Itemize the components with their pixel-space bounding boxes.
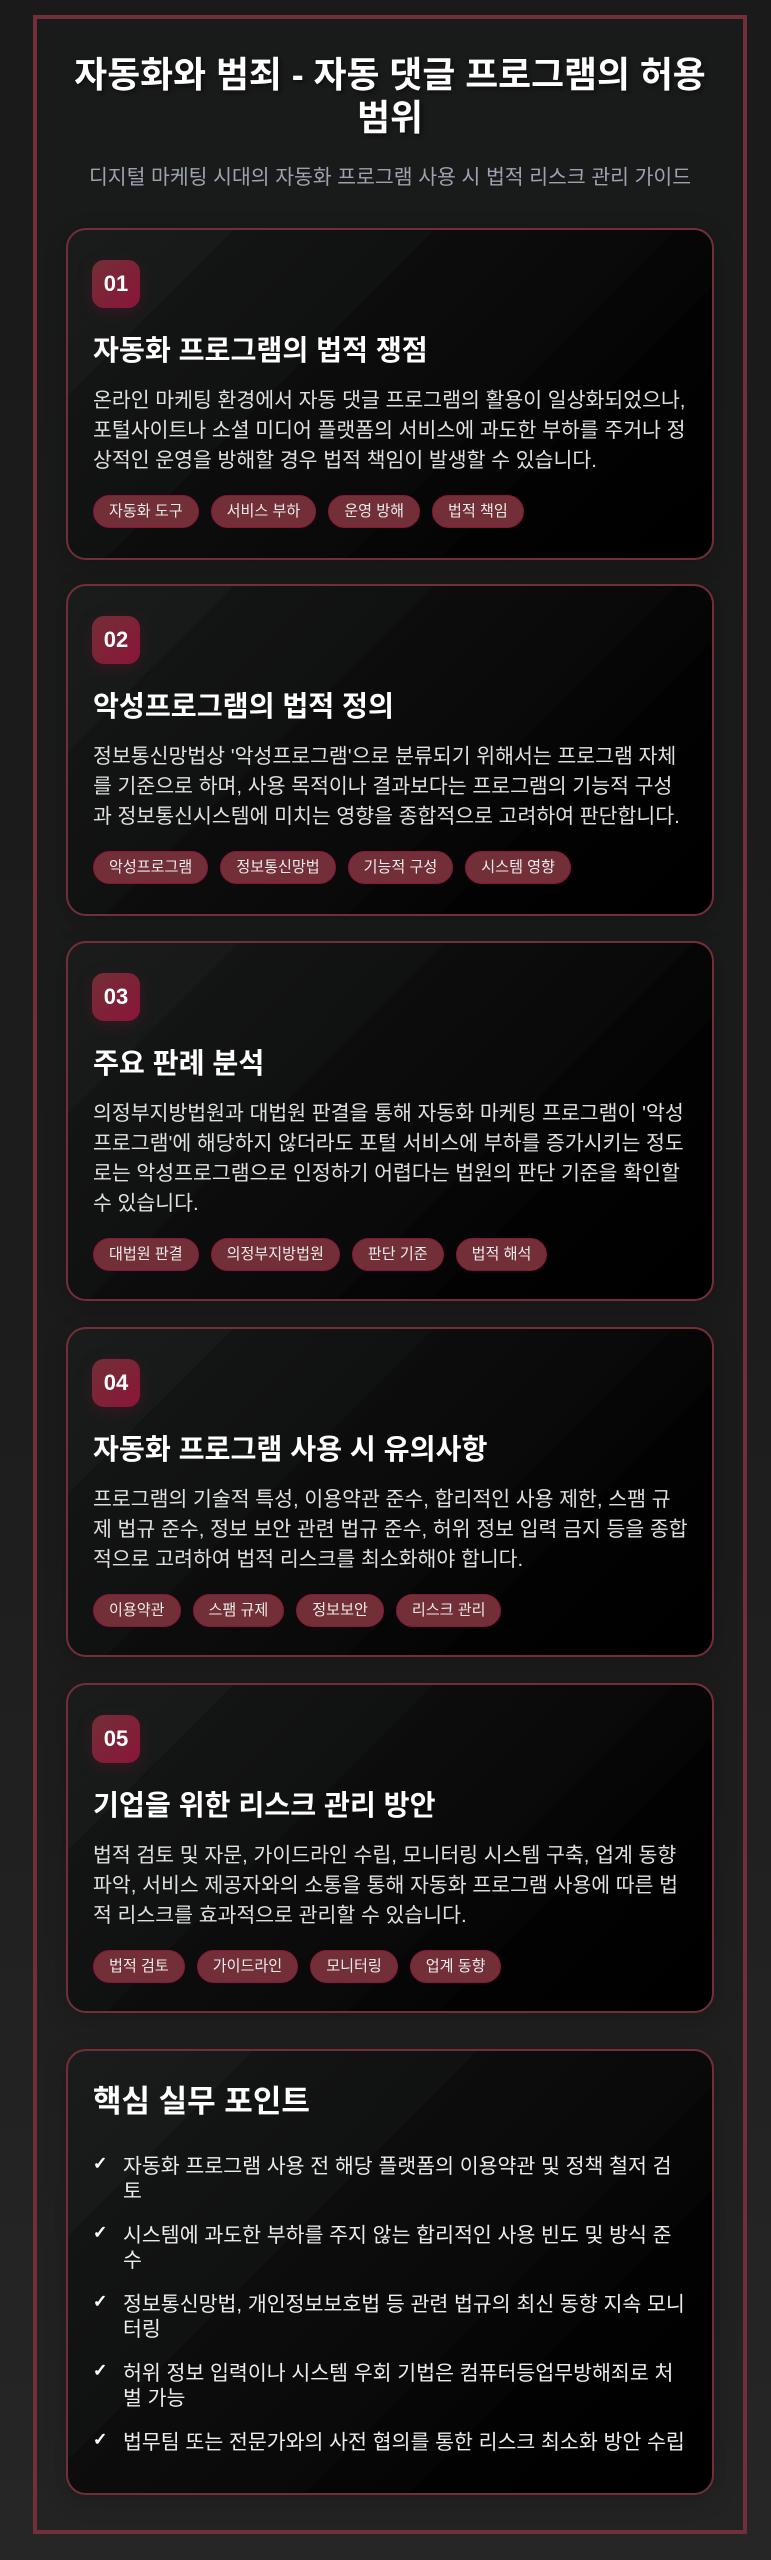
tags 02: 시스템 영향 bbox=[481, 859, 555, 876]
badge 01: 01 bbox=[104, 271, 128, 296]
tags 05: 업계 동향 bbox=[426, 1958, 485, 1975]
body text 04 bbox=[93, 1488, 688, 1571]
panel: 03 case analysis bbox=[66, 941, 714, 1301]
body text 03: 프로그램'에 해당하지 않더라도 포털 서비스에 부하를 증가시키는 정도 bbox=[93, 1132, 684, 1155]
checklist item 5: ✓ bbox=[93, 2430, 107, 2450]
heading 05: 기업을 위한 리스크 관리 방안 bbox=[93, 1789, 436, 1821]
panel: 02 malware definition bbox=[66, 584, 714, 916]
body text 02: 정보통신망법상 '악성프로그램'으로 분류되기 위해서는 프로그램 자체 bbox=[93, 745, 676, 768]
tags 01: 운영 방해 bbox=[344, 503, 404, 520]
body text 02: 를 기준으로 하며, 사용 목적이나 결과보다는 프로그램의 기능적 구성 bbox=[93, 775, 672, 798]
tags 04 bbox=[93, 1594, 501, 1627]
tags 01: 서비스 부하 bbox=[227, 503, 300, 520]
body text 01: 상적인 운영을 방해할 경우 법적 책임이 발생할 수 있습니다. bbox=[93, 449, 597, 472]
heading 04: 자동화 프로그램 사용 시 유의사항 bbox=[93, 1433, 487, 1465]
tags 01: 자동화 도구 bbox=[109, 503, 183, 520]
tags 01: 법적 책임 bbox=[448, 503, 508, 520]
tags 04: 정보보안 bbox=[312, 1602, 368, 1619]
body text 05: 적 리스크를 효과적으로 관리할 수 있습니다. bbox=[93, 1904, 467, 1927]
panel: 04 precautions bbox=[66, 1327, 714, 1657]
tags 05: 가이드라인 bbox=[213, 1958, 282, 1975]
heading 03: 주요 판례 분석 bbox=[93, 1047, 264, 1079]
panel: 01 legal issues bbox=[66, 228, 714, 560]
badge 05 bbox=[92, 1715, 140, 1763]
checklist item 3 bbox=[93, 2292, 685, 2341]
checklist item 5: 법무팀 또는 전문가와의 사전 협의를 통한 리스크 최소화 방안 수립 bbox=[123, 2431, 685, 2454]
subtitle: 디지털 마케팅 시대의 자동화 프로그램 사용 시 법적 리스크 관리 가이드 bbox=[89, 166, 691, 189]
badge 02 bbox=[92, 616, 140, 664]
checklist item 3: ✓ bbox=[93, 2292, 107, 2312]
tags 05: 모니터링 bbox=[326, 1958, 382, 1975]
checklist item 1: 자동화 프로그램 사용 전 해당 플랫폼의 이용약관 및 정책 철저 검 bbox=[123, 2155, 672, 2178]
title bbox=[74, 55, 706, 138]
tags 03: 대법원 판결 bbox=[109, 1246, 183, 1263]
tags 05 bbox=[93, 1950, 501, 1983]
body text 05 bbox=[93, 1844, 678, 1927]
tags 02: 정보통신망법 bbox=[236, 859, 320, 876]
heading 01: 자동화 프로그램의 법적 쟁점 bbox=[93, 334, 428, 366]
tags 01 bbox=[93, 495, 524, 528]
tags 03: 판단 기준 bbox=[368, 1246, 428, 1263]
tags 03: 의정부지방법원 bbox=[227, 1246, 324, 1263]
tags 02: 악성프로그램 bbox=[109, 859, 192, 876]
panel: key practical points bbox=[66, 2049, 714, 2495]
tags 04: 스팸 규제 bbox=[209, 1602, 268, 1619]
checklist item 2: ✓ bbox=[93, 2223, 107, 2243]
tags 03 bbox=[93, 1238, 547, 1271]
checklist item 4: ✓ bbox=[93, 2361, 107, 2381]
body text 04: 프로그램의 기술적 특성, 이용약관 준수, 합리적인 사용 제한, 스팸 규 bbox=[93, 1488, 671, 1511]
body text 03: 로는 악성프로그램으로 인정하기 어렵다는 법원의 판단 기준을 확인할 bbox=[93, 1162, 680, 1185]
title: 범위 bbox=[357, 98, 423, 138]
checklist item 1: 토 bbox=[123, 2180, 142, 2203]
body text 03 bbox=[93, 1102, 684, 1215]
title: 자동화와 범죄 - 자동 댓글 프로그램의 허용 bbox=[74, 55, 706, 95]
body text 02 bbox=[93, 745, 680, 828]
panel: 05 risk management bbox=[66, 1683, 714, 2013]
tags 05: 법적 검토 bbox=[109, 1958, 169, 1975]
body text 03: 수 있습니다. bbox=[93, 1192, 199, 1215]
body text 01 bbox=[93, 389, 686, 472]
tags 03: 법적 해석 bbox=[472, 1246, 531, 1263]
body text 05: 법적 검토 및 자문, 가이드라인 수립, 모니터링 시스템 구축, 업계 동향 bbox=[93, 1844, 676, 1867]
tags 04: 이용약관 bbox=[109, 1602, 165, 1619]
tags 02: 기능적 구성 bbox=[364, 859, 437, 876]
tags 04: 리스크 관리 bbox=[412, 1602, 485, 1619]
tags 02 bbox=[93, 851, 571, 884]
body text 02: 과 정보통신시스템에 미치는 영향을 종합적으로 고려하여 판단합니다. bbox=[93, 805, 680, 828]
checklist item 4 bbox=[93, 2361, 673, 2410]
body text 04: 제 법규 준수, 정보 보안 관련 법규 준수, 허위 정보 입력 금지 등을 종합 bbox=[93, 1518, 688, 1541]
checklist item 1: ✓ bbox=[93, 2154, 107, 2174]
checklist item 3: 정보통신망법, 개인정보보호법 등 관련 법규의 최신 동향 지속 모니 bbox=[123, 2293, 685, 2316]
heading: key points: 핵심 실무 포인트 bbox=[93, 2084, 310, 2119]
badge 05: 05 bbox=[104, 1726, 128, 1751]
badge 03: 03 bbox=[104, 984, 128, 1009]
badge 01 bbox=[92, 260, 140, 308]
badge 02: 02 bbox=[104, 627, 128, 652]
checklist item 4: 벌 가능 bbox=[123, 2387, 185, 2410]
body text 05: 파악, 서비스 제공자와의 소통을 통해 자동화 프로그램 사용에 따른 법 bbox=[93, 1874, 678, 1897]
checklist item 2: 수 bbox=[123, 2249, 142, 2272]
checklist item 2 bbox=[93, 2223, 672, 2272]
checklist item 2: 시스템에 과도한 부하를 주지 않는 합리적인 사용 빈도 및 방식 준 bbox=[123, 2224, 672, 2247]
badge 04: 04 bbox=[104, 1370, 128, 1395]
body text 01: 포털사이트나 소셜 미디어 플랫폼의 서비스에 과도한 부하를 주거나 정 bbox=[93, 419, 686, 442]
checklist item 1 bbox=[93, 2154, 672, 2203]
body text 04: 적으로 고려하여 법적 리스크를 최소화해야 합니다. bbox=[93, 1548, 523, 1571]
checklist item 3: 터링 bbox=[123, 2318, 161, 2341]
body text 01: 온라인 마케팅 환경에서 자동 댓글 프로그램의 활용이 일상화되었으나, bbox=[93, 389, 686, 412]
checklist item 4: 허위 정보 입력이나 시스템 우회 기법은 컴퓨터등업무방해죄로 처 bbox=[123, 2362, 673, 2385]
body text 03: 의정부지방법원과 대법원 판결을 통해 자동화 마케팅 프로그램이 '악성 bbox=[93, 1102, 684, 1125]
badge 03 bbox=[92, 973, 140, 1021]
badge 04 bbox=[92, 1359, 140, 1407]
heading 02: 악성프로그램의 법적 정의 bbox=[93, 690, 394, 722]
